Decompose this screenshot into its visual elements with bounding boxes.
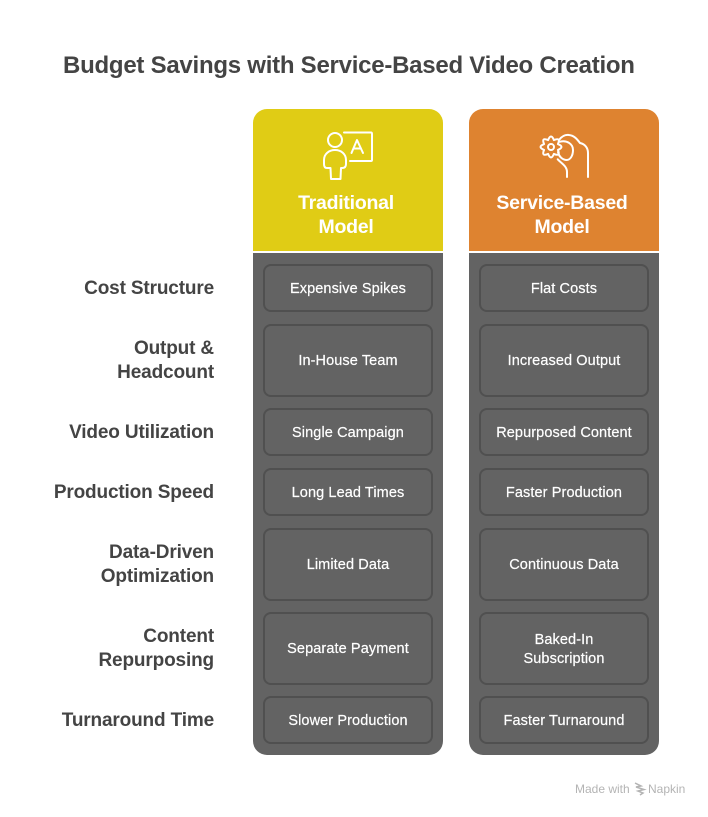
- icon: hand holding gear: [540, 134, 589, 178]
- header text: Service-Based: [496, 192, 628, 214]
- footer: Made with Napkin: Made with: [575, 782, 630, 796]
- row label: Data-Driven Optimization: Data-Driven: [109, 542, 214, 563]
- cell: Expensive Spikes: [290, 280, 406, 296]
- row label: Output & Headcount: Output &: [134, 338, 214, 359]
- row label: Data-Driven Optimization: Optimization: [101, 566, 214, 587]
- row label: Output & Headcount: Headcount: [117, 362, 214, 383]
- cell: Flat Costs: [531, 280, 597, 296]
- header text: Traditional: [298, 192, 394, 214]
- header text: Model: [318, 216, 374, 238]
- cell: Repurposed Content: [496, 424, 632, 440]
- cell: [479, 408, 649, 456]
- cell: Faster Production: [506, 484, 622, 500]
- cell: [263, 696, 433, 744]
- panel: Service-Based Model values: [469, 253, 659, 755]
- cell: [263, 468, 433, 516]
- cell: [479, 324, 649, 397]
- cell: [263, 264, 433, 312]
- panel: Traditional Model values: [253, 253, 443, 755]
- row label: Video Utilization: Video Utilization: [69, 422, 214, 443]
- row label: Content Repurposing: Repurposing: [98, 650, 214, 671]
- header text: [298, 192, 394, 238]
- cell: Long Lead Times: [292, 484, 404, 500]
- cell: [479, 468, 649, 516]
- cell: Separate Payment: [287, 641, 409, 657]
- header text: [496, 192, 628, 238]
- cell: [263, 324, 433, 397]
- cell: [479, 612, 649, 685]
- panel header: Service-Based Model: [469, 109, 659, 251]
- cell: Slower Production: [288, 712, 408, 728]
- footer: Made with Napkin: [575, 782, 685, 796]
- cell: In-House Team: [298, 353, 398, 369]
- cell: [263, 612, 433, 685]
- cell: [263, 408, 433, 456]
- footer: Made with Napkin: Napkin: [648, 782, 685, 796]
- cell: Single Campaign: [292, 424, 404, 440]
- cell: Baked-In: [535, 632, 593, 648]
- row label: Content Repurposing: [98, 626, 214, 671]
- cell: [479, 696, 649, 744]
- cell: [263, 528, 433, 601]
- cell: Faster Turnaround: [504, 712, 624, 728]
- row label: Data-Driven Optimization: [101, 542, 214, 587]
- cell: [479, 528, 649, 601]
- cell: [479, 264, 649, 312]
- cell: Limited Data: [307, 557, 389, 573]
- cell: Subscription: [524, 650, 604, 666]
- row label: Production Speed: Production Speed: [54, 482, 214, 503]
- cell: Continuous Data: [509, 557, 619, 573]
- header text: Model: [534, 216, 590, 238]
- panel header: Traditional Model: [253, 109, 443, 251]
- icon: teacher with letter board: [323, 132, 373, 180]
- title: Budget Savings with Service-Based Video Creation: [63, 52, 635, 79]
- row label: Content Repurposing: Content: [143, 626, 214, 647]
- row label: Output & Headcount: [117, 338, 214, 383]
- cell: Increased Output: [508, 353, 620, 369]
- row label: Turnaround Time: Turnaround Time: [62, 710, 214, 731]
- row label: Cost Structure: Cost Structure: [84, 278, 214, 299]
